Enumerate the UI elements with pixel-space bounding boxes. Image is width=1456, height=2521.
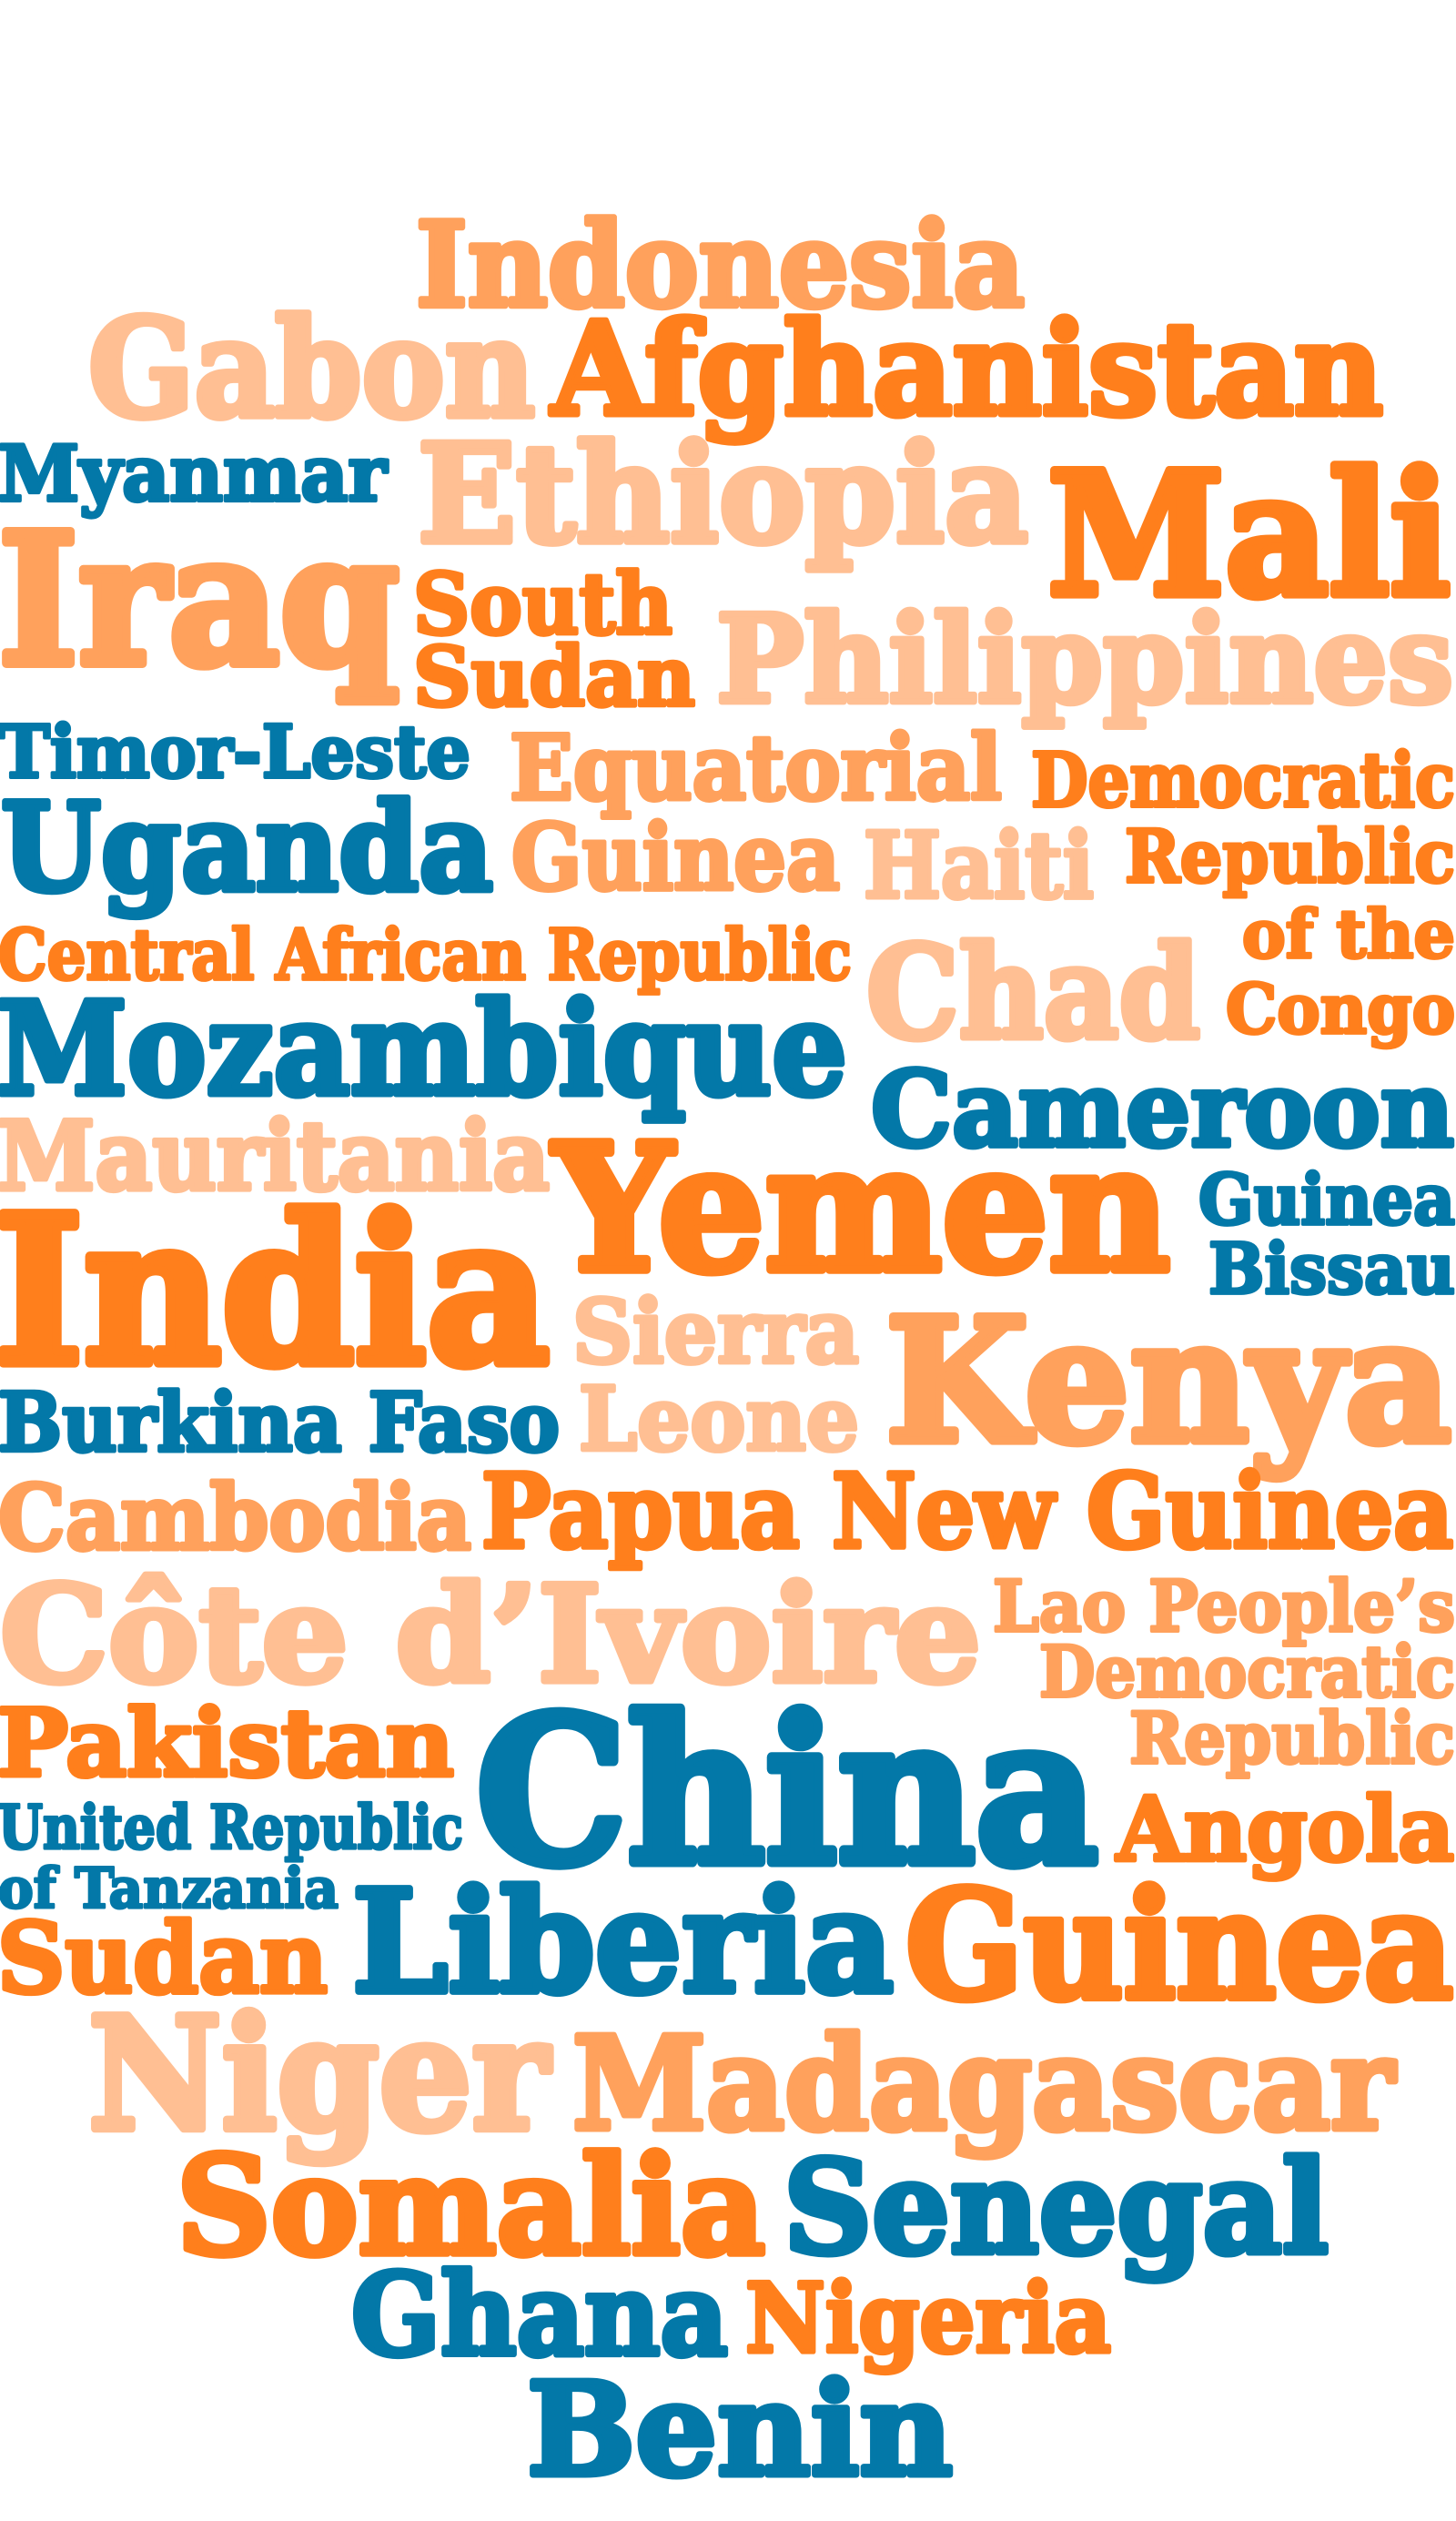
word: Uganda: Uganda [1,775,493,919]
word: Gabon: Gabon [88,289,535,449]
word: Timor-Leste: Timor-Leste [0,709,470,795]
word: Ghana: Ghana [351,2249,728,2382]
word: Côte d'Ivoire: Côte d’Ivoire [0,1557,981,1713]
word: Central African Republic: Central African Republic [0,915,852,997]
word: Cambodia: Cambodia [0,1466,471,1571]
word: of the: of the [1242,896,1455,974]
word: Myanmar: Myanmar [0,429,389,519]
word: Indonesia: Indonesia [416,197,1025,334]
word: Madagascar: Madagascar [572,2010,1396,2160]
word: Leone: Leone [579,1368,859,1471]
word: Nigeria: Nigeria [745,2262,1111,2374]
word: Haiti: Haiti [864,812,1094,919]
word: Somalia: Somalia [177,2127,765,2286]
word: Yemen: Yemen [551,1107,1170,1311]
word: China: China [476,1674,1098,1910]
word: Benin: Benin [527,2355,953,2506]
word: Kenya: Kenya [885,1281,1451,1482]
word: Sudan: Sudan [0,1902,328,2016]
word: Burkina Faso: Burkina Faso [0,1374,560,1470]
word: Cameroon: Cameroon [871,1048,1454,1170]
word: Senegal: Senegal [784,2133,1329,2283]
word: Pakistan: Pakistan [0,1689,454,1798]
word: Iraq: Iraq [0,493,399,706]
word: Mozambique: Mozambique [0,975,847,1125]
word: Chad: Chad [866,918,1200,1068]
word: Niger: Niger [88,1983,551,2166]
word: Equatorial: Equatorial [510,716,1002,821]
word: South: South [413,554,672,653]
word: United Republic: United Republic [0,1792,463,1863]
word: Sierra: Sierra [572,1281,859,1383]
word: Ethiopia: Ethiopia [418,415,1028,574]
word: Angola: Angola [1116,1777,1454,1881]
word: Afghanistan: Afghanistan [550,295,1383,445]
word: India: India [0,1171,550,1411]
word: Mauritania: Mauritania [0,1099,550,1212]
word: Guinea: Guinea [511,804,840,911]
word: Sudan: Sudan [413,629,695,725]
word: Liberia: Liberia [352,1858,894,2025]
word: of Tanzania: of Tanzania [0,1857,339,1921]
